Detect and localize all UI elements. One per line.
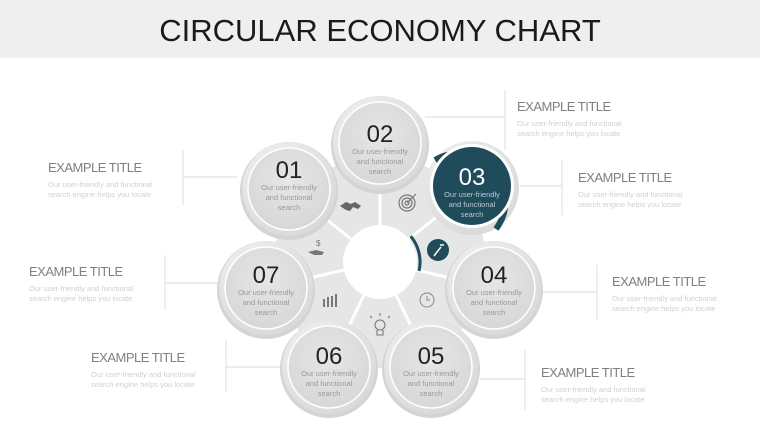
circle 02: search <box>369 167 391 176</box>
circle 05: search <box>420 389 442 398</box>
label: 02: EXAMPLE TITLE <box>517 99 612 114</box>
circle 02: 02 <box>367 121 393 148</box>
circle 03 highlighted: Our user-friendly <box>444 190 500 199</box>
label: 06: EXAMPLE TITLE <box>91 350 186 365</box>
circle 07: search <box>255 308 277 317</box>
circular diagram <box>217 96 543 418</box>
circle 07: Our user-friendly <box>238 288 294 297</box>
circle 04: and functional <box>471 298 518 307</box>
circle 02: and functional <box>357 157 404 166</box>
label: 01: EXAMPLE TITLE <box>48 160 143 175</box>
label: 06: search engine helps you locate <box>91 380 194 389</box>
label: 04: search engine helps you locate <box>612 304 715 313</box>
circle 01 <box>240 142 338 240</box>
circle 02: Our user-friendly <box>352 147 408 156</box>
circle 02 <box>331 96 429 194</box>
circle 03 highlighted: and functional <box>449 200 496 209</box>
label: 03: EXAMPLE TITLE <box>578 170 673 185</box>
label: 05: Our user-friendly and functional <box>541 385 646 394</box>
label: 02: search engine helps you locate <box>517 129 620 138</box>
circle 06: and functional <box>306 379 353 388</box>
circle 05 <box>382 320 480 418</box>
icon: handshake <box>340 202 361 211</box>
label: 04: Our user-friendly and functional <box>612 294 717 303</box>
icon: bulb <box>370 313 390 335</box>
circle 05: and functional <box>408 379 455 388</box>
icon: target <box>399 194 416 211</box>
icon: hook (dark) <box>427 239 449 261</box>
label: 05 <box>541 365 646 404</box>
circle 04: 04 <box>481 262 507 289</box>
icon: clock <box>420 293 434 307</box>
dark arc on hub <box>411 236 420 271</box>
icon: money hand: $ <box>316 239 321 248</box>
circle 01: Our user-friendly <box>261 183 317 192</box>
label: 07: Our user-friendly and functional <box>29 284 134 293</box>
header band <box>0 0 760 58</box>
circle 04: Our user-friendly <box>466 288 522 297</box>
circle 03 highlighted: search <box>461 210 483 219</box>
circle 06: search <box>318 389 340 398</box>
text blocks <box>29 99 717 404</box>
connector lines <box>165 90 597 410</box>
title: CIRCULAR ECONOMY CHART <box>159 13 601 48</box>
label: 01: search engine helps you locate <box>48 190 151 199</box>
icon: chart <box>323 294 337 307</box>
label: 03: search engine helps you locate <box>578 200 681 209</box>
label: 03 <box>578 170 683 209</box>
label: 07: search engine helps you locate <box>29 294 132 303</box>
label: 06 <box>91 350 196 389</box>
label: 06: Our user-friendly and functional <box>91 370 196 379</box>
circle 03 highlighted: 03 <box>459 164 485 191</box>
label: 02: Our user-friendly and functional <box>517 119 622 128</box>
label: 07 <box>29 264 134 303</box>
circle 05: Our user-friendly <box>403 369 459 378</box>
label: 04: EXAMPLE TITLE <box>612 274 707 289</box>
label: 05: EXAMPLE TITLE <box>541 365 636 380</box>
circle 06 <box>280 320 378 418</box>
circle 05: 05 <box>418 343 444 370</box>
circle 04 <box>445 241 543 339</box>
circle 01: 01 <box>276 157 302 184</box>
circle 06: Our user-friendly <box>301 369 357 378</box>
icon: money hand <box>308 239 324 255</box>
label: 03: Our user-friendly and functional <box>578 190 683 199</box>
circle 01: and functional <box>266 193 313 202</box>
circle 03 highlighted <box>425 141 519 235</box>
circle 04: search <box>483 308 505 317</box>
label: 07: EXAMPLE TITLE <box>29 264 124 279</box>
circle 07: 07 <box>253 262 279 289</box>
label: 04 <box>612 274 717 313</box>
circle 07 <box>217 241 315 339</box>
label: 01: Our user-friendly and functional <box>48 180 153 189</box>
label: 05: search engine helps you locate <box>541 395 644 404</box>
circle 01: search <box>278 203 300 212</box>
circle 07: and functional <box>243 298 290 307</box>
label: 02 <box>517 99 622 138</box>
backdrop ring <box>274 156 486 368</box>
label: 01 <box>48 160 153 199</box>
circle 06: 06 <box>316 343 342 370</box>
